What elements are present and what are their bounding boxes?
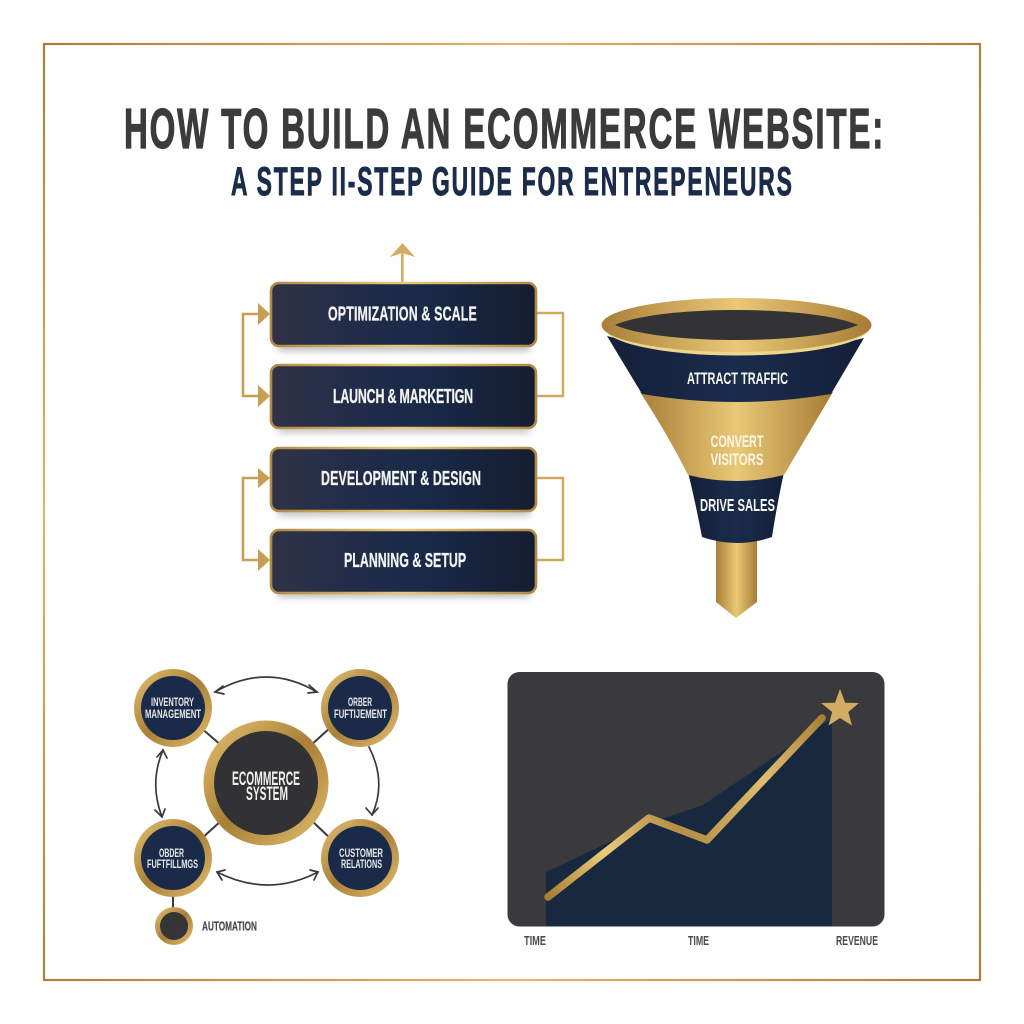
node: customer relations: RELATIONS (341, 857, 382, 871)
node: order fulfillment: OBDER (159, 846, 184, 860)
node: order fulfillment (134, 819, 212, 897)
panel: revenue growth chart (508, 672, 884, 948)
step: planning and setup: PLANNING & SETUP (344, 549, 466, 572)
node: inventory management (134, 669, 212, 747)
panel: ecommerce system diagram (134, 669, 399, 945)
subtitle: A STEP II-STEP GUIDE FOR ENTREPENEURS (231, 160, 792, 204)
node: order fulfilment (321, 669, 399, 747)
step: planning and setup (271, 530, 536, 597)
panel: process steps (243, 243, 563, 597)
step: optimization and scale: OPTIMIZATION & SCALE (328, 302, 477, 325)
node: customer relations: CUSTOMER (339, 846, 383, 860)
node: order fulfillment: FUFTFILLMGS (147, 857, 198, 871)
connector: right bottom bracket (537, 478, 563, 560)
arrow: upward exit (390, 243, 415, 283)
step: launch and marketing: LAUNCH & MARKETIGN (333, 385, 473, 408)
funnel spout (716, 540, 757, 618)
title: HOW TO BUILD AN ECOMMERCE WEBSITE: (124, 97, 883, 160)
connector: right top bracket (537, 313, 563, 396)
hub: ecommerce system: SYSTEM (246, 784, 288, 805)
funnel rim (602, 298, 872, 356)
step: launch and marketing (271, 365, 536, 433)
node: order fulfilment: ORBER (348, 695, 372, 709)
funnel band: attract traffic (607, 336, 864, 402)
axis label: time left: TIME (524, 934, 546, 948)
funnel band: convert visitors (640, 392, 833, 481)
step: development and design (271, 448, 536, 516)
hub: ecommerce system: ECOMMERCE (232, 769, 300, 790)
funnel band: drive sales (688, 472, 784, 543)
chart area (546, 718, 832, 926)
funnel band: drive sales: DRIVE SALES (700, 495, 775, 515)
arrows: cycle between nodes (155, 677, 379, 885)
icon: star (821, 689, 859, 726)
funnel band: attract traffic: ATTRACT TRAFFIC (687, 369, 788, 388)
node: inventory management: MANAGEMENT (145, 707, 201, 721)
chart line (548, 718, 822, 897)
node: customer relations (321, 819, 399, 897)
hub: ecommerce system (204, 720, 328, 846)
node: inventory management: INVENTORY (151, 695, 194, 709)
funnel band: convert visitors: CONVERT (710, 432, 764, 451)
step: development and design: DEVELOPMENT & DESIGN (321, 467, 481, 490)
node: automation (155, 907, 257, 945)
connectors to hub (173, 727, 332, 910)
axis label: revenue: REVENUE (836, 934, 878, 948)
arrow: left top bracket (243, 303, 270, 407)
axis label: time centre: TIME (688, 934, 709, 948)
step: optimization and scale (271, 283, 536, 351)
node: order fulfilment: FUFTIJEMENT (334, 707, 387, 721)
node: automation: AUTOMATION (202, 920, 257, 934)
chart background (508, 672, 884, 926)
funnel band: convert visitors: VISITORS (710, 450, 764, 469)
arrow: left bottom bracket (243, 468, 270, 571)
panel: funnel (602, 298, 872, 618)
